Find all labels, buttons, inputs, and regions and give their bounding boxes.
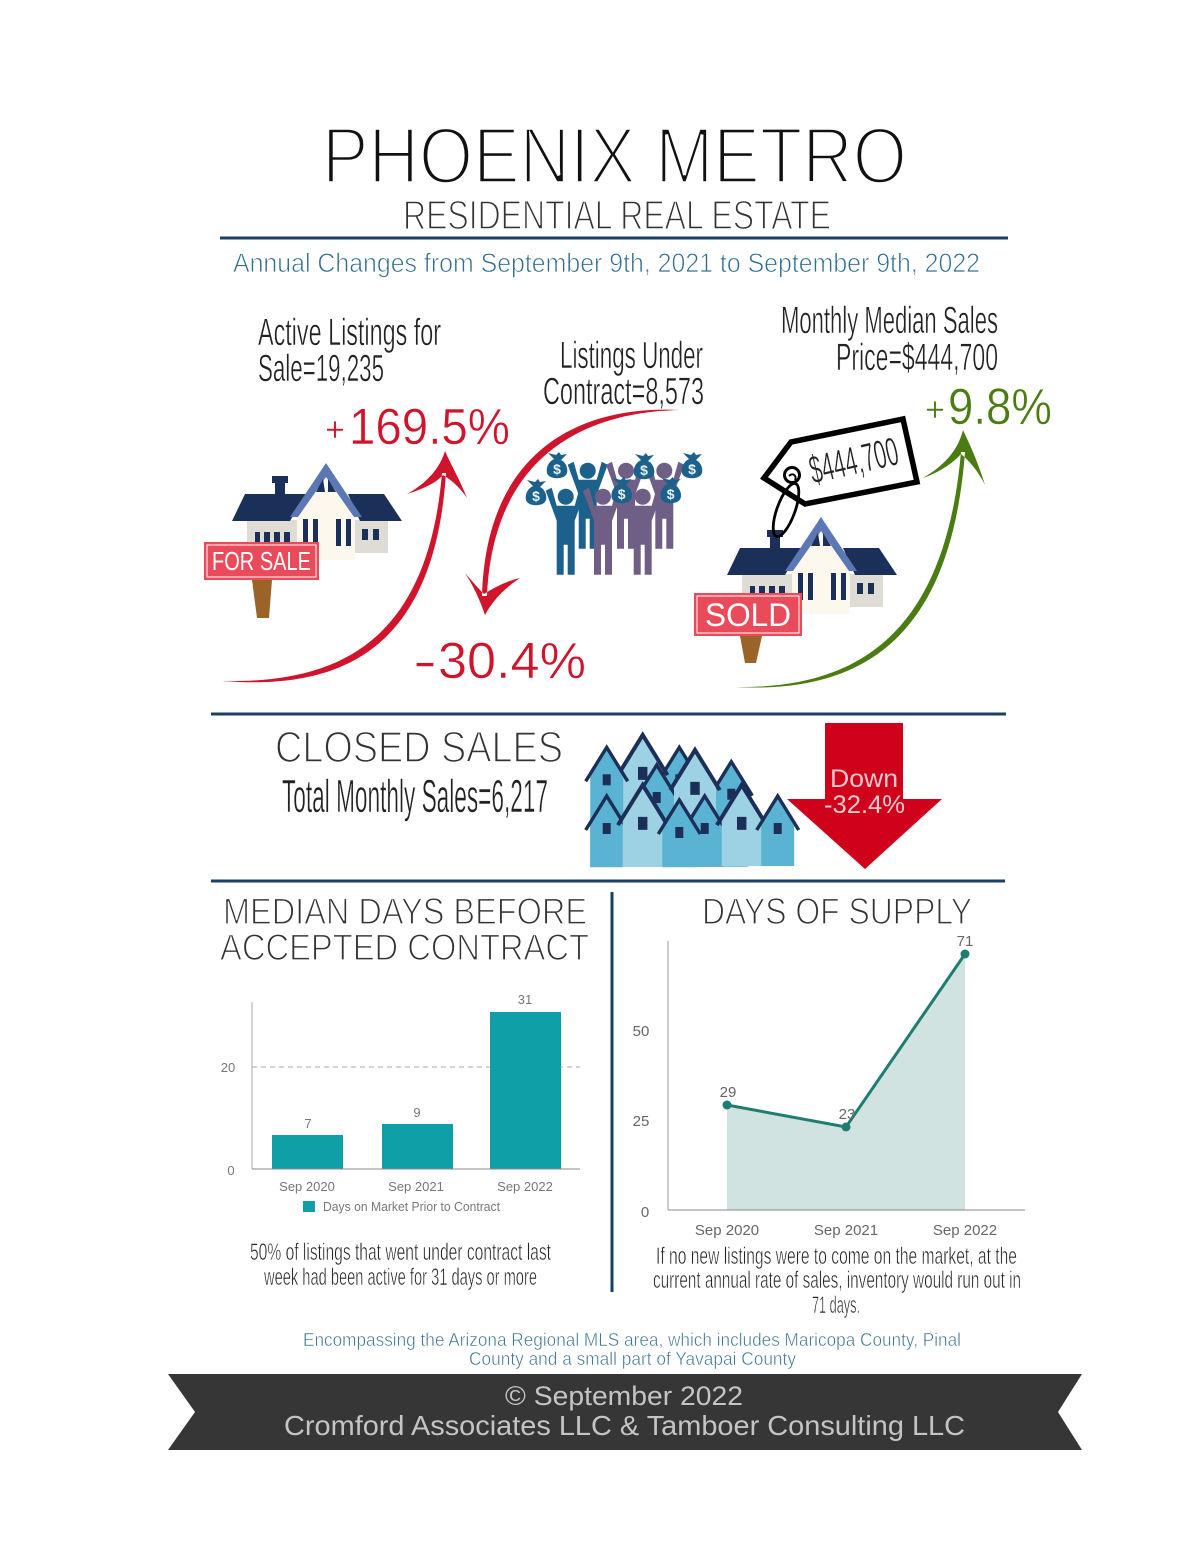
icon: price tag bbox=[764, 419, 917, 539]
panel: active listings bbox=[204, 312, 510, 682]
bar chart: Sep 2020 bbox=[279, 1179, 335, 1194]
area chart: Sep 2020 bbox=[695, 1222, 759, 1239]
arrow: down with percent: -32.4% bbox=[824, 791, 905, 819]
active listings label: Sale=19,235 bbox=[258, 348, 384, 390]
note: If no new listings were to come on the market, at the bbox=[656, 1243, 1017, 1270]
date range subtitle: Annual Changes from September 9th, 2021 to September 9th, 2022 bbox=[233, 248, 980, 278]
arrow: down with percent: Down bbox=[830, 765, 898, 793]
bar chart: Sep 2022 bbox=[497, 1179, 553, 1194]
icon: house for sale: FOR SALE bbox=[212, 546, 311, 576]
bar chart: 20 bbox=[221, 1060, 235, 1075]
title: PHOENIX METRO bbox=[322, 111, 907, 200]
area chart bbox=[633, 933, 1025, 1239]
panel: listings under contract bbox=[413, 335, 704, 689]
percent change: 169.5% bbox=[349, 398, 510, 455]
panel: closed sales: Total Monthly Sales=6,217 bbox=[282, 770, 548, 822]
icon: house sold bbox=[694, 517, 897, 663]
title bbox=[322, 111, 907, 238]
legend: Days on Market Prior to Contract bbox=[323, 1199, 500, 1214]
note bbox=[653, 1243, 1021, 1319]
price label: Monthly Median Sales bbox=[781, 300, 998, 342]
panel: days of supply bbox=[633, 891, 1025, 1319]
icon: house sold: SOLD bbox=[705, 597, 791, 633]
panel: median days bbox=[220, 891, 589, 1291]
percent change: 30.4% bbox=[438, 632, 586, 689]
subtitle: RESIDENTIAL REAL ESTATE bbox=[403, 192, 831, 238]
footer ribbon: Cromford Associates LLC & Tamboer Consulting LLC bbox=[284, 1410, 965, 1441]
percent change: 9.8% bbox=[948, 378, 1052, 435]
price label bbox=[781, 300, 998, 379]
heading bbox=[220, 891, 589, 968]
heading: MEDIAN DAYS BEFORE bbox=[223, 891, 587, 932]
panel: closed sales bbox=[275, 723, 942, 869]
footnote: County and a small part of Yavapai County bbox=[469, 1349, 796, 1369]
bar chart: Sep 2021 bbox=[388, 1179, 444, 1194]
under contract label bbox=[543, 335, 704, 413]
note: week had been active for 31 days or more bbox=[263, 1264, 537, 1291]
bar chart: 0 bbox=[227, 1163, 235, 1178]
note: 71 days. bbox=[812, 1292, 860, 1319]
area chart: 0 bbox=[641, 1204, 649, 1221]
area chart: Sep 2022 bbox=[933, 1222, 997, 1239]
bar chart: 7 bbox=[304, 1116, 312, 1131]
arrow: down red bbox=[465, 410, 680, 615]
note: 50% of listings that went under contract last bbox=[250, 1239, 551, 1266]
area chart: 23 bbox=[839, 1106, 855, 1123]
arrow: up red bbox=[222, 451, 467, 682]
under contract label: Contract=8,573 bbox=[543, 371, 704, 413]
active listings label bbox=[258, 312, 441, 390]
heading: CLOSED SALES bbox=[275, 723, 563, 772]
price label: Price=$444,700 bbox=[836, 337, 998, 379]
footnote bbox=[303, 1330, 961, 1369]
footnote: Encompassing the Arizona Regional MLS area, which includes Maricopa County, Pinal bbox=[303, 1330, 961, 1350]
percent change: + bbox=[325, 411, 345, 449]
area chart: 29 bbox=[720, 1084, 736, 1101]
percent change: + bbox=[925, 391, 945, 429]
active listings label: Active Listings for bbox=[258, 312, 441, 354]
icon: houses bbox=[586, 735, 799, 867]
icon: people with money bags bbox=[526, 452, 702, 575]
under contract label: Listings Under bbox=[560, 335, 703, 377]
area chart: Sep 2021 bbox=[814, 1222, 878, 1239]
bar chart: 9 bbox=[413, 1105, 421, 1120]
note bbox=[250, 1239, 551, 1291]
arrow: up green bbox=[735, 430, 985, 688]
icon: house for sale bbox=[204, 463, 402, 618]
heading: ACCEPTED CONTRACT bbox=[220, 927, 589, 968]
area chart: 25 bbox=[633, 1113, 649, 1130]
panel: median sales price bbox=[694, 300, 1052, 688]
bar chart: 31 bbox=[518, 992, 532, 1007]
arrow: down with percent bbox=[787, 723, 942, 869]
bar chart bbox=[221, 992, 580, 1214]
area chart: 71 bbox=[957, 933, 973, 950]
footer ribbon bbox=[168, 1374, 1082, 1450]
area chart: 50 bbox=[633, 1023, 649, 1040]
footer ribbon: © September 2022 bbox=[505, 1381, 743, 1411]
icon: price tag: $444,700 bbox=[805, 430, 903, 493]
heading: DAYS OF SUPPLY bbox=[702, 891, 972, 932]
percent change: - bbox=[413, 633, 437, 689]
